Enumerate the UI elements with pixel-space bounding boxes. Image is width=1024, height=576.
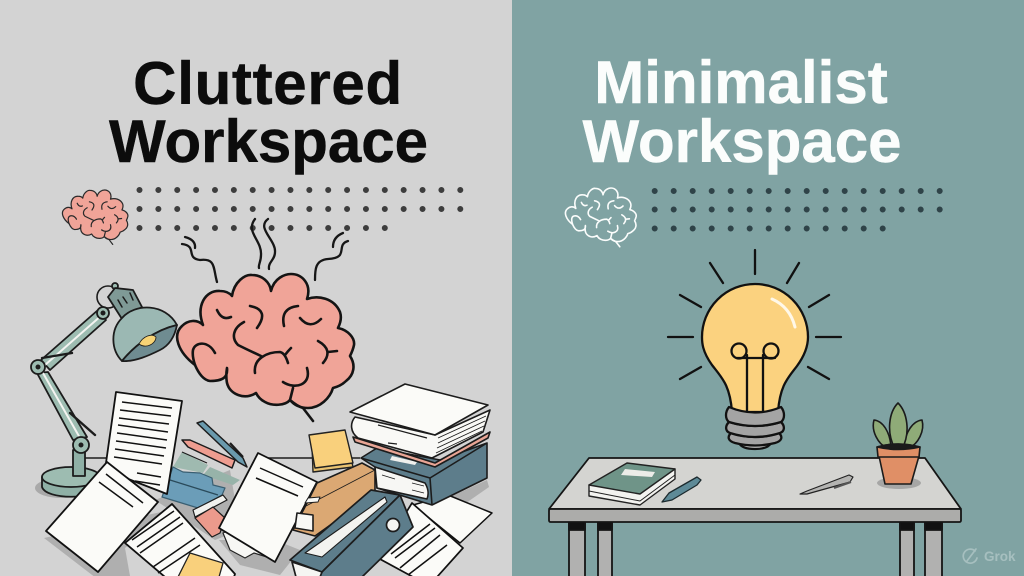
panel: cluttered workspace: [0, 0, 512, 576]
stack of books: [350, 384, 490, 505]
title: Minimalist Workspace: Minimalist: [594, 49, 888, 116]
lamp opening: [122, 325, 177, 361]
icon: white outline brain: [565, 188, 636, 247]
desk front edge: [549, 509, 961, 522]
panel: minimalist workspace: [512, 0, 1024, 576]
dot rows: [140, 190, 461, 228]
book cover: [350, 384, 488, 435]
crumpled white sheet: [223, 525, 270, 558]
pot rim: [877, 444, 920, 457]
white pages under folder: [193, 495, 227, 517]
paper at the bottom: [125, 504, 235, 576]
desk lamp: [31, 283, 177, 498]
paper with text lines: [105, 392, 182, 494]
right paper under binder: [378, 495, 492, 576]
tilted paper in the centre: [219, 453, 317, 562]
title: Minimalist Workspace: Workspace: [582, 108, 902, 175]
filament: [732, 344, 778, 413]
light rays: [668, 250, 841, 379]
watermark text: Grok: [984, 549, 1016, 564]
pot body: [879, 456, 919, 484]
title: Cluttered Workspace: Workspace: [109, 108, 428, 175]
desk top: [549, 458, 961, 509]
lamp arms: [31, 286, 119, 453]
dot rows: [655, 191, 941, 228]
stress squiggles above brain: [182, 219, 348, 282]
grey-blue binder: [290, 490, 413, 576]
pink cover: [353, 432, 490, 467]
blue crumpled folder: [162, 467, 225, 508]
bulb glass: [702, 284, 808, 412]
desk legs: [569, 522, 942, 576]
watermark: Grok: [963, 549, 1016, 564]
orange box file: [293, 463, 375, 536]
dark book: [361, 443, 487, 505]
pink pencil: [182, 440, 235, 468]
title: Minimalist Workspace: [582, 49, 902, 175]
pen clip: [230, 443, 243, 457]
title: Cluttered Workspace: Cluttered: [133, 50, 403, 117]
pot shadow: [877, 477, 921, 489]
watermark icon: [963, 549, 977, 563]
white book pages: [352, 410, 490, 458]
leaves: [873, 403, 923, 449]
sticky note on box: [309, 430, 353, 472]
large blank paper front-left: [46, 462, 158, 572]
green paper pile: [162, 421, 247, 537]
icon: large overloaded brain: [177, 274, 354, 421]
bulb highlight: [772, 299, 795, 327]
screw base: [726, 407, 784, 449]
grey pen: [800, 475, 853, 494]
notebook: [589, 463, 675, 505]
potted plant: [873, 403, 923, 489]
icon: small pink brain: [62, 190, 128, 244]
title: Cluttered Workspace: [109, 50, 428, 175]
pink folded paper: [195, 507, 225, 537]
blue pen: [662, 477, 701, 502]
sticky note at the bottom: [178, 553, 223, 576]
blue pen: [197, 421, 247, 467]
minimal desk: [549, 458, 961, 576]
desk edge line: [85, 457, 360, 459]
lamp shade: [113, 308, 177, 361]
shadows under the pile: [44, 470, 489, 576]
icon: light bulb: [702, 284, 808, 449]
lamp base: [35, 450, 100, 498]
lamp bulb: [139, 335, 156, 346]
lamp neck: [108, 283, 142, 319]
